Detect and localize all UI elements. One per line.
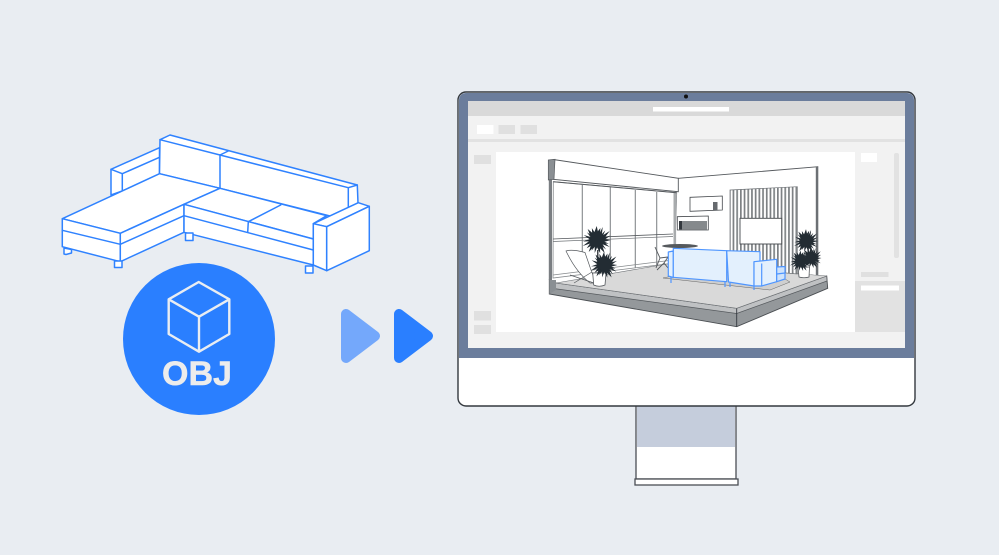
stand foot (635, 479, 738, 485)
plant: left pot (589, 250, 619, 286)
icon: cube (169, 282, 229, 352)
sidebar button top (474, 155, 491, 164)
plant: right (789, 228, 823, 278)
right wall (677, 167, 818, 275)
canvas (496, 152, 855, 332)
monitor (458, 92, 915, 406)
stand shadow (637, 406, 735, 447)
title bar (468, 101, 905, 116)
platform corner block (549, 280, 556, 294)
dining chair (655, 247, 668, 270)
scrollbar (894, 153, 899, 258)
right panel label (861, 272, 888, 277)
dark soffit end (548, 159, 555, 180)
platform base (549, 276, 828, 327)
badge circle (123, 263, 275, 415)
stand neck (636, 405, 736, 479)
toolbar button 3 (520, 125, 537, 134)
window frame (553, 182, 677, 278)
monitor body (458, 92, 915, 406)
arrow: dark triangle (399, 314, 428, 358)
window rail (553, 182, 677, 193)
sidebar button lower 1 (474, 311, 491, 320)
toolbar button 2 (498, 125, 515, 134)
rug (663, 270, 790, 290)
toolbar divider (468, 139, 905, 142)
upper shelf (690, 196, 722, 211)
right panel button (861, 153, 877, 162)
window wall (549, 180, 677, 280)
3D room scene (548, 159, 828, 327)
platform light band (550, 276, 827, 314)
header soffit (553, 160, 678, 192)
app window (468, 101, 905, 348)
lounge chair (566, 250, 596, 283)
monitor stand (635, 405, 738, 485)
slatted wall panel (730, 187, 797, 274)
icon: OBJ badge (123, 263, 275, 415)
icon: blue outline sofa (62, 135, 369, 273)
window background (468, 101, 905, 348)
right lower panel (855, 281, 905, 332)
right lower input (861, 286, 899, 290)
sidebar button lower 2 (474, 325, 491, 334)
OBJ label: OBJ (162, 355, 232, 393)
floor (556, 263, 827, 308)
arrow: light triangle (346, 314, 375, 358)
dining table (662, 244, 698, 248)
right post (674, 192, 676, 262)
monitor bezel (459, 93, 914, 358)
left post (549, 180, 552, 280)
TV (740, 218, 782, 244)
title pill (653, 107, 729, 112)
toolbar button active (477, 125, 494, 134)
lower shelf (677, 216, 708, 230)
blue sofa in room (668, 248, 785, 290)
platform edge corner (736, 308, 738, 327)
window glass (553, 182, 677, 278)
right wall edge (816, 167, 818, 275)
plant: left tall (581, 224, 612, 266)
camera (684, 94, 688, 98)
